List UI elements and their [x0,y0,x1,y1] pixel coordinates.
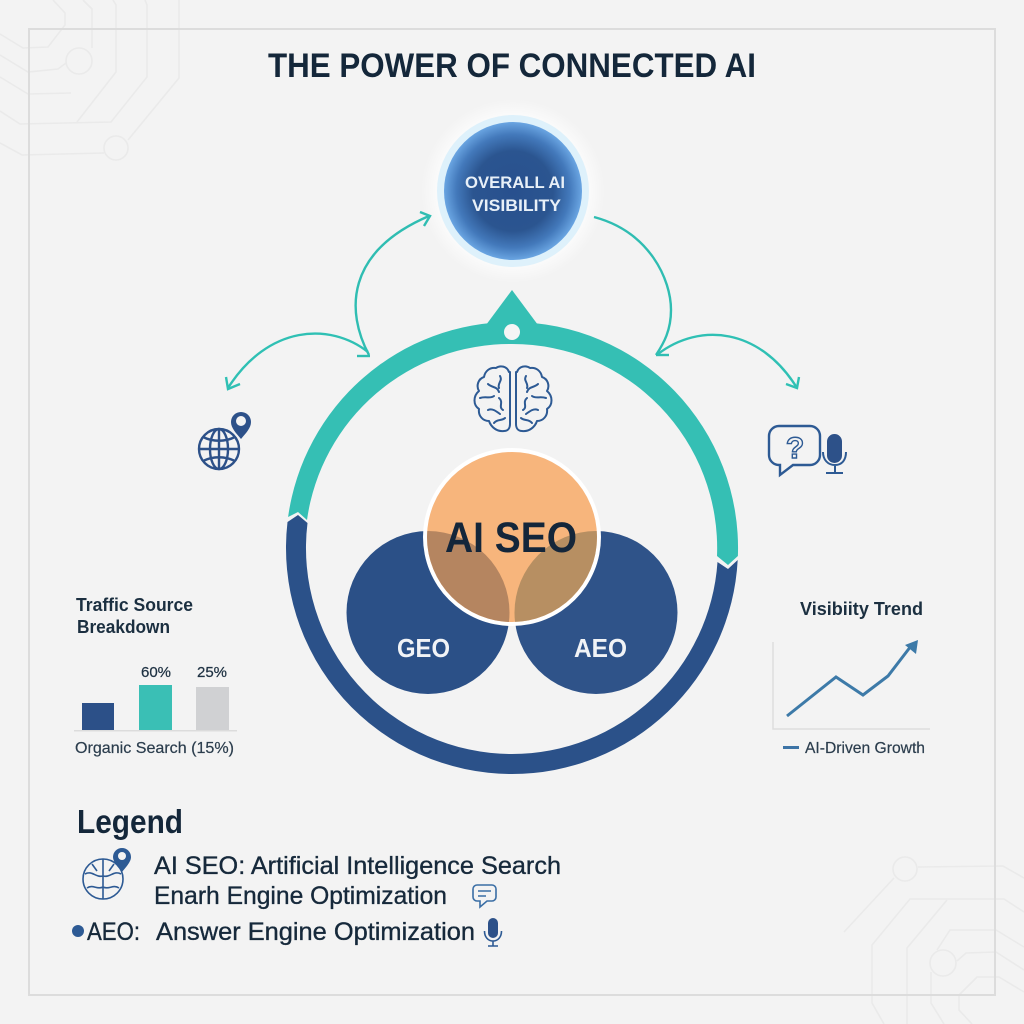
node: overall AI visibility: VISIBILITY [472,196,562,215]
icon: chat bubble [473,885,496,907]
legend: AI SEO: Artificial Intelligence Search [154,852,561,880]
panel: traffic source breakdown: 25% [197,664,227,681]
panel: traffic source breakdown: Organic Search (15%) [75,740,234,757]
panel: visibility trend: Visibiity Trend [800,599,923,619]
node: overall AI visibility: OVERALL AI [465,173,565,192]
legend: Answer Engine Optimization [156,918,475,946]
icon: globe with location pin [199,412,251,469]
arrow: ring to GEO globe [226,334,368,389]
venn: AI SEO circle: AI SEO [445,514,577,562]
panel: visibility trend: AI-Driven Growth [805,740,925,757]
ring: navy lower arc [286,515,738,774]
arrow: ring to AEO question icon [658,335,799,388]
venn: AI SEO circle [423,448,601,626]
venn: AEO circle [514,531,678,694]
ring: teal upper arc [288,290,738,565]
AEO bullet [72,925,84,937]
legend [72,803,561,946]
icon: question bubble with microphone [769,426,846,475]
panel: traffic source breakdown: Traffic Source [76,595,193,615]
icon: question bubble with microphone: ? [786,432,804,465]
arrow: ring to overall visibility, left [356,212,430,356]
title: THE POWER OF CONNECTED AI [268,47,756,85]
legend: Enarh Engine Optimization [154,882,447,910]
icon: microphone [484,918,502,946]
legend: AEO: [87,918,140,946]
panel: traffic source breakdown [74,595,237,757]
panel: traffic source breakdown: Breakdown [77,617,170,637]
venn: GEO circle [346,531,510,694]
venn: AEO circle: AEO [574,633,627,663]
panel: traffic source breakdown: 60% [141,664,171,681]
icon: AI SEO brain globe [83,848,131,899]
legend: Legend [77,803,183,840]
panel: visibility trend [773,599,930,757]
icon: brain [474,366,552,431]
arrow: overall visibility to ring, right [594,217,671,355]
node: overall AI visibility [421,99,605,283]
venn: GEO circle: GEO [397,633,450,663]
